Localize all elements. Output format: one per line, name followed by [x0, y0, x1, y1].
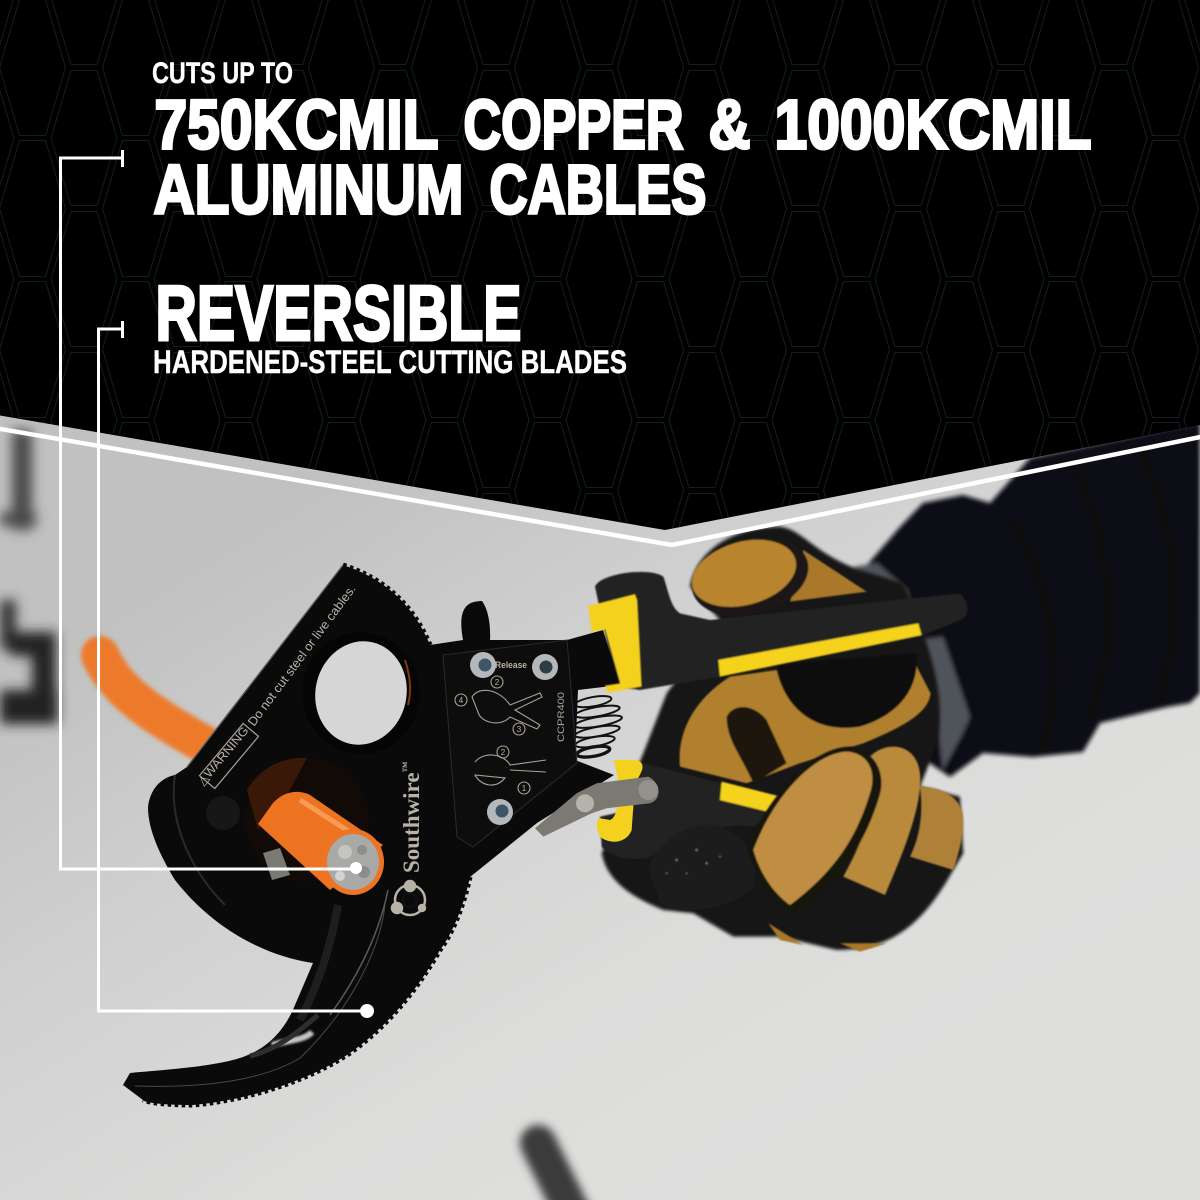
glove [595, 525, 967, 952]
spring [574, 694, 623, 759]
white chevron line [0, 428, 1200, 545]
heading: cable capacity: CABLES [490, 150, 706, 228]
connector: reversible blades [98, 321, 374, 1018]
cutter teeth [143, 565, 470, 1105]
Southwire logo text: Southwire [399, 772, 424, 873]
Southwire logo mark [392, 881, 425, 915]
heading: cable capacity: 750KCMIL [154, 86, 438, 164]
blade edge details [135, 565, 388, 1086]
glove palm [680, 550, 931, 783]
cable recess [206, 758, 369, 882]
cut cable [258, 792, 384, 895]
sleeve [853, 422, 1200, 777]
blurred background tools [0, 430, 58, 724]
photo background [0, 400, 1200, 1200]
instruction plate [443, 640, 577, 847]
instruction plate: 2 [495, 678, 500, 687]
warning text: △WARNING [195, 724, 252, 788]
Southwire logo text: ™ [401, 761, 413, 772]
instruction plate: CCPR400 [556, 692, 566, 742]
glove thumb [683, 525, 817, 628]
warning text [195, 582, 359, 788]
heading: cable capacity: & [708, 86, 750, 164]
connector: cable capacity [60, 150, 362, 874]
heading: reversible: REVERSIBLE [156, 269, 522, 357]
glove silhouette [602, 527, 963, 950]
cutter [123, 565, 620, 1105]
blurred handle at bottom [538, 1143, 575, 1200]
instruction plate: 2 [501, 748, 506, 757]
heading: cable capacity [154, 86, 1092, 228]
upper handle [595, 572, 967, 690]
gripped fingers [648, 747, 963, 952]
lower handle [600, 763, 781, 859]
warning text: Do not cut steel or live cables. [245, 582, 359, 729]
heading: cable capacity: ALUMINUM [154, 150, 464, 228]
instruction plate: 4 [459, 696, 464, 705]
header panel [0, 0, 1200, 530]
cutter body [123, 565, 620, 1105]
plate diagrams [455, 676, 546, 794]
subheading: blades: HARDENED-STEEL CUTTING BLADES [153, 344, 627, 380]
yellow handle caps and steel latch [535, 594, 659, 842]
plate bolts [470, 652, 558, 825]
orange cable background section [100, 655, 215, 750]
instruction plate: 3 [517, 725, 522, 734]
large hole [302, 632, 420, 754]
heading: cable capacity: 1000KCMIL [774, 86, 1092, 164]
instruction plate: Release [495, 660, 527, 670]
heading: cuts up to: CUTS UP TO [152, 57, 293, 90]
heading: cable capacity: COPPER [464, 86, 684, 164]
instruction plate: 1 [522, 784, 527, 793]
